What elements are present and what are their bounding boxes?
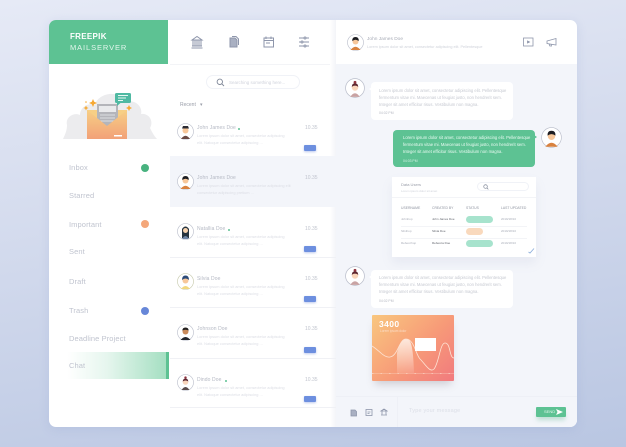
search box bbox=[206, 75, 300, 89]
row 2: John James Doe bbox=[197, 175, 236, 181]
nav: Inbox: Inbox bbox=[69, 163, 88, 172]
middle header line bbox=[170, 64, 330, 65]
avatar bbox=[177, 374, 194, 391]
nav: Trash: Trash bbox=[69, 306, 88, 315]
row 5: Johnson Doe bbox=[197, 326, 228, 332]
chat header: Lorem ipsum dolor sit amet, consectetur adipiscing elit. Pellentesque bbox=[367, 45, 482, 49]
icon: megaphone bbox=[546, 38, 556, 46]
avatar bbox=[177, 123, 194, 140]
row 1: 10.35 bbox=[305, 125, 318, 131]
chat header: John James Doe bbox=[367, 37, 403, 42]
row 2: consectetur adipiscing pretium ... bbox=[197, 190, 254, 195]
middle panel shade bbox=[330, 20, 336, 427]
input placeholder: Type your message bbox=[409, 408, 460, 414]
avatar bbox=[177, 223, 194, 240]
avatar: incoming 1 bbox=[345, 78, 365, 98]
message: incoming 1: Lorem ipsum dolor sit amet, consectetur adipiscing elit. Pellentesque bbox=[379, 88, 506, 92]
message: incoming 2: fermentum vitae mi. Maecenas ut feugiat justo, non hendrerit sem. bbox=[379, 282, 502, 287]
selected row highlight bbox=[170, 156, 336, 207]
bubble tail bbox=[535, 136, 537, 138]
avatar bbox=[177, 273, 194, 290]
avatar bbox=[177, 173, 194, 190]
icon: search bbox=[216, 78, 224, 86]
icon: double check bbox=[528, 248, 534, 254]
message: outgoing: Integer sit amet efficitur risus. Vestibulum non magna. bbox=[403, 149, 503, 154]
send button bbox=[536, 407, 566, 417]
nav: Chat active bbox=[67, 352, 169, 379]
row 3: Natallia Doe bbox=[197, 226, 225, 232]
message: outgoing bbox=[393, 130, 535, 167]
dashboard card bbox=[49, 20, 577, 427]
message: incoming 1: Integer sit amet efficitur risus. Vestibulum non magna. bbox=[379, 102, 479, 106]
input icons bbox=[350, 408, 388, 416]
row 4: elit. Natoque consectetur adipiscing ... bbox=[197, 291, 263, 296]
table: Silvihop bbox=[401, 229, 412, 233]
send button: SEND bbox=[544, 409, 555, 414]
input divider bbox=[397, 397, 398, 427]
row 3: 10.35 bbox=[305, 226, 318, 232]
nav: Important: Important bbox=[69, 220, 102, 229]
message: outgoing: Lorem ipsum dolor sit amet, consectetur adipiscing elit. Pellentesque bbox=[403, 135, 530, 140]
row 1: Lorem ipsum dolor sit amet, consectetur adipiscing bbox=[197, 133, 285, 138]
message: incoming 2: 04:02 PM bbox=[379, 299, 394, 303]
search box: Searching something here... bbox=[229, 80, 285, 84]
brand title: MAILSERVER bbox=[70, 43, 127, 52]
brand title bbox=[70, 32, 127, 52]
toolbar icons bbox=[190, 36, 309, 48]
table search bbox=[477, 182, 529, 191]
avatar bbox=[347, 34, 364, 51]
divider bbox=[170, 307, 336, 308]
row 4 bbox=[177, 273, 318, 304]
row 4: Silvia Doe bbox=[197, 276, 221, 282]
line chart bbox=[372, 338, 454, 374]
badge: inbox bbox=[141, 164, 149, 172]
nav: Starred: Starred bbox=[69, 191, 94, 200]
table: John James Doe bbox=[432, 217, 455, 221]
brand title: FREEPIK bbox=[70, 32, 107, 41]
message: incoming 2: Lorem ipsum dolor sit amet, consectetur adipiscing elit. Pellentesque bbox=[379, 275, 506, 280]
bubble tail bbox=[370, 276, 371, 278]
table: USERNAME bbox=[401, 206, 420, 210]
row 2: 10.35 bbox=[305, 175, 318, 181]
row 4: Lorem ipsum dolor sit amet, consectetur adipiscing bbox=[197, 284, 285, 289]
table title: Data Users bbox=[401, 182, 421, 187]
chart value: 3400 bbox=[379, 319, 400, 329]
table: STATUS bbox=[466, 206, 479, 210]
input bar bbox=[336, 396, 577, 427]
chart card bbox=[372, 315, 454, 381]
row 3 bbox=[177, 223, 318, 254]
table: 2019/18/10 bbox=[501, 241, 516, 245]
chart subtitle: Lorem ipsum dolor bbox=[380, 329, 406, 333]
row 3: Lorem ipsum dolor sit amet, consectetur adipiscing bbox=[197, 234, 285, 239]
bubble tail bbox=[370, 88, 371, 90]
row 5: Lorem ipsum dolor sit amet, consectetur adipiscing bbox=[197, 334, 285, 339]
table: Rebecca Doe bbox=[432, 241, 450, 245]
table: 2019/18/10 bbox=[501, 217, 516, 221]
row 6 bbox=[177, 374, 318, 404]
list row dividers group bbox=[170, 257, 336, 359]
message: incoming 2: Integer sit amet efficitur risus. Vestibulum non magna. bbox=[379, 289, 479, 294]
nav: Chat active: Chat bbox=[69, 361, 85, 370]
table: 2019/18/10 bbox=[501, 229, 516, 233]
nav: Sent: Sent bbox=[69, 247, 85, 256]
row 5 bbox=[177, 324, 318, 356]
row 4: 10.35 bbox=[305, 276, 318, 282]
row 5: elit. Natoque consectetur adipiscing ... bbox=[197, 341, 263, 346]
icon: video bbox=[523, 38, 534, 46]
badge: important bbox=[141, 220, 149, 228]
row 5: 10.35 bbox=[305, 326, 318, 332]
chat header bbox=[347, 34, 556, 51]
sidebar green header bbox=[49, 20, 168, 64]
divider bbox=[170, 407, 336, 408]
table bbox=[392, 197, 536, 257]
message: incoming 1: 04:02 PM bbox=[379, 111, 394, 115]
table: CREATED BY bbox=[432, 206, 453, 210]
row 2 bbox=[177, 173, 318, 195]
message: incoming 1: fermentum vitae mi. Maecenas ut feugiat justo, non hendrerit sem. bbox=[379, 94, 502, 100]
avatar bbox=[177, 324, 194, 341]
row 1: John James Doe bbox=[197, 125, 236, 131]
row 6: Lorem ipsum dolor sit amet, consectetur adipiscing bbox=[197, 385, 285, 390]
message: incoming 2 bbox=[371, 270, 513, 308]
table: LAST UPDATED bbox=[501, 206, 526, 210]
avatar: outgoing bbox=[541, 127, 562, 148]
message: incoming 1 bbox=[371, 82, 513, 120]
recent dropdown: Recent ▾ bbox=[180, 102, 203, 108]
table: Johnhop bbox=[401, 217, 413, 221]
chat panel background bbox=[336, 64, 577, 427]
row 1 bbox=[177, 123, 318, 154]
row 6: Dindo Doe bbox=[197, 377, 222, 383]
table: Silvia Doe bbox=[432, 229, 446, 233]
illustration: mail envelope in cloud bbox=[63, 93, 157, 139]
avatar: incoming 2 bbox=[345, 266, 365, 286]
nav: Draft: Draft bbox=[69, 277, 86, 286]
row 6: 10.35 bbox=[305, 377, 318, 383]
row 1: elit. Natoque consectetur adipiscing ... bbox=[197, 140, 263, 145]
nav: Deadline Project: Deadline Project bbox=[69, 334, 126, 343]
table card: data users bbox=[392, 177, 536, 257]
table: Rebecchop bbox=[401, 241, 416, 245]
message: outgoing: 04:03 PM bbox=[403, 159, 418, 163]
row 3: elit. Natoque consectetur adipiscing ... bbox=[197, 241, 263, 246]
table card: data users: Lorem ipsum dolor sit amet bbox=[401, 189, 437, 193]
badge: trash bbox=[141, 307, 149, 315]
row 2: Lorem ipsum dolor sit amet, consectetur adipiscing elit bbox=[197, 183, 291, 188]
message: outgoing: fermentum vitae mi. Maecenas ut feugiat justo, non hendrerit sem. bbox=[403, 142, 526, 147]
row 6: elit. Natoque consectetur adipiscing ... bbox=[197, 392, 263, 397]
